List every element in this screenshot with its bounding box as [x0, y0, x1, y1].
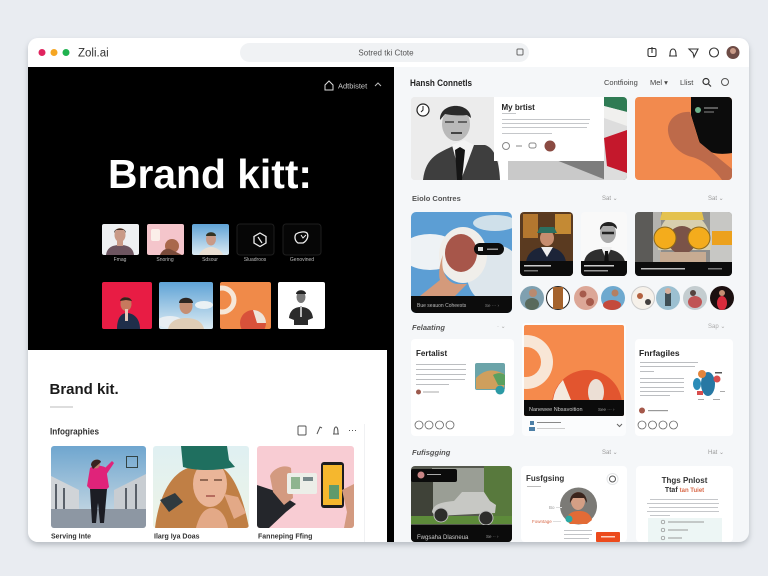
mini chart	[693, 370, 725, 400]
card: orange feature: Nanewee Nbsavoition	[529, 407, 583, 413]
icon tile: hexagon	[237, 224, 274, 255]
card: product text	[636, 466, 733, 542]
account link: Adtbistet	[338, 82, 368, 90]
section heading: Infographies	[50, 426, 99, 438]
section heading: packaging: Fufisgging	[412, 448, 451, 457]
card: yellow binoculars	[635, 212, 732, 276]
orange hand card	[635, 97, 732, 180]
tile: black and white portrait	[278, 282, 325, 329]
thumbnail: pink portrait	[147, 224, 184, 255]
panel: black hero	[28, 67, 394, 542]
card: profile packaging: Bo	[549, 505, 555, 510]
card: man in suit	[581, 212, 627, 276]
section heading: featuring: · ⌄	[497, 324, 506, 330]
card: product text: Ttaf tan Tuiet	[665, 487, 704, 494]
account link	[325, 81, 381, 90]
image: hand holding face: Bue seauon Coheests	[417, 303, 467, 309]
card: infographics right	[635, 339, 733, 436]
image: hand holding face: Se ··· ›	[485, 303, 500, 308]
thumbnail: man in sweater	[102, 224, 139, 255]
thumbnail captions: Genovined	[290, 257, 314, 263]
icon tile: badge	[283, 224, 321, 255]
app name: Zoli.ai	[78, 48, 109, 60]
section heading: packaging: Sat ⌄	[602, 450, 618, 456]
panel heading: Brand kit.	[50, 381, 119, 398]
image: hands with card and phone	[257, 446, 354, 528]
image: vintage car	[411, 466, 512, 542]
hero card	[411, 97, 627, 180]
card: profile packaging	[521, 466, 627, 542]
thumbnail captions	[114, 257, 314, 262]
image: vintage car: Se ·· ›	[486, 534, 499, 539]
section heading: featured	[412, 196, 722, 201]
gallery header	[410, 78, 729, 87]
card: profile packaging: Fowntage	[532, 519, 552, 524]
image: hand holding face	[411, 212, 512, 313]
tile: orange food	[220, 282, 271, 329]
image captions: Ilarg Iya Doas	[154, 534, 200, 540]
panel: right gallery	[400, 78, 734, 542]
card: profile packaging: Fusfgsing	[526, 474, 564, 483]
search bar: Sotred tki Ctote	[358, 48, 414, 58]
section heading: featuring: Felaating	[412, 323, 445, 332]
section heading: featured: Eiolo Contres	[412, 194, 461, 203]
window control dots	[38, 49, 70, 56]
thumbnail captions: Fmag	[114, 257, 127, 263]
card: infographics right: Fnrfagiles	[639, 348, 680, 358]
image: woman in green hat	[153, 446, 249, 528]
toolbar icons	[648, 47, 718, 57]
image: vintage car: Fwgsaha Dlasneua	[417, 535, 469, 541]
card: article left	[411, 339, 514, 436]
small landscape picture	[475, 363, 505, 394]
thumbnail captions: Sdsour	[202, 257, 218, 263]
thumbnail row one	[102, 224, 321, 263]
section heading: featuring	[412, 323, 725, 332]
thumbnail captions: Snoring	[156, 257, 174, 263]
profile card	[494, 97, 604, 161]
thumbnail: man and sky	[192, 224, 229, 255]
avatar row	[520, 286, 734, 310]
thumbnail captions: Sluadroos	[244, 257, 267, 263]
section heading: featuring: Sap ⌄	[708, 324, 725, 330]
portrait circle	[560, 488, 597, 524]
gallery header: Llist	[680, 78, 694, 87]
tile: sky portrait	[157, 282, 213, 329]
tile: red portrait	[102, 282, 152, 329]
gallery header: Contfioing	[604, 78, 638, 87]
card: article left: Fertalist	[416, 349, 447, 358]
user avatar	[726, 46, 740, 59]
card: product text: Thgs Pnlost	[662, 476, 708, 485]
image captions	[51, 534, 312, 540]
profile card: My brtist	[502, 103, 535, 112]
image: woman in pink jacket	[51, 446, 146, 528]
panel: brand kit	[28, 350, 387, 542]
main title: Brand kitt:	[108, 151, 312, 197]
section heading: packaging: Hat ⌄	[708, 450, 724, 456]
card: orange feature	[499, 323, 626, 440]
image captions: Serving Inte	[51, 534, 91, 540]
top bar	[28, 38, 749, 67]
search bar	[240, 43, 529, 62]
card: orange feature: See ··· ›	[598, 407, 615, 412]
thumbnail row two	[102, 282, 325, 329]
section heading: featured: Sat ⌄	[708, 196, 724, 202]
image captions: Fanneping Ffing	[258, 534, 312, 540]
section heading: featured: Sat ⌄	[602, 196, 618, 202]
gallery header: Mel ▾	[650, 78, 668, 87]
section heading: packaging	[412, 448, 724, 457]
section icons	[298, 426, 356, 435]
portrait	[416, 103, 500, 180]
card: man in green hat	[520, 212, 573, 276]
gallery header: Hansh Connetls	[410, 78, 472, 89]
